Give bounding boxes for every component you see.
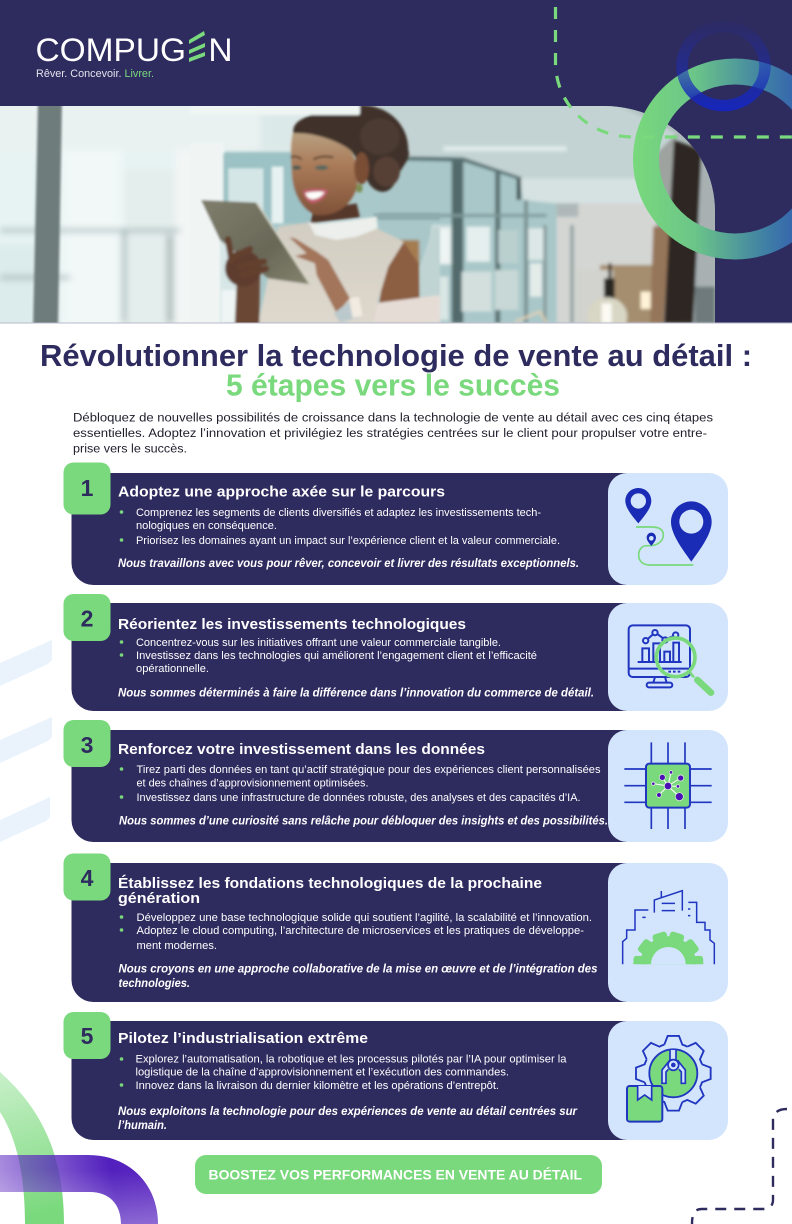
call to action button: [195, 1155, 602, 1194]
icon: map pins and route: [625, 488, 712, 565]
step 5 tagline: l’humain.: [118, 1119, 167, 1132]
woman: [190, 105, 440, 330]
step 5 heading: Pilotez l’industrialisation extrême: [118, 1030, 368, 1047]
step 1 bullets: Comprenez les segments de clients diversifiés et adaptez les investissements tech-: [136, 507, 541, 519]
step 2 heading: Réorientez les investissements technologiques: [118, 616, 466, 633]
step 1 card: [64, 462, 728, 585]
step 5 bullets: logistique de la chaîne d’approvisionnement et l’exécution des commandes.: [136, 1066, 509, 1078]
step 5 number: [64, 1012, 110, 1059]
step 2 number: [64, 594, 110, 641]
step 1 bullets: Priorisez les domaines ayant un impact sur l’expérience client et la valeur commerciale.: [136, 535, 560, 547]
title: [40, 338, 752, 402]
call to action button: BOOSTEZ VOS PERFORMANCES EN VENTE AU DÉTAIL: [208, 1166, 582, 1182]
step 5 tagline: Nous exploitons la technologie pour des expériences de vente au détail centrées sur: [118, 1105, 578, 1118]
step 5 bullets: [120, 1054, 567, 1092]
step 4 tagline: Nous croyons en une approche collaborative de la mise en œuvre et de l’intégration des: [118, 962, 598, 976]
title: 5 étapes vers le succès: [226, 368, 560, 402]
intro text: [73, 410, 713, 456]
step 5 number: 5: [81, 1023, 94, 1049]
step 4 card: [64, 854, 728, 1002]
step 3 bullets: Investissez dans une infrastructure de données robuste, des analyses et des capacités d’IA.: [136, 792, 580, 804]
step 1 number: 1: [81, 475, 94, 501]
step 4 number: 4: [81, 865, 94, 891]
icon: robot arm gear and box: [627, 1036, 711, 1122]
step 3 bullets: et des chaînes d’approvisionnement optimisées.: [136, 778, 368, 790]
step 3 number: [64, 720, 110, 767]
step 5 bullets: Explorez l’automatisation, la robotique et les processus pilotés par l’IA pour optimiser la: [136, 1054, 567, 1066]
intro text: essentielles. Adoptez l’innovation et privilégiez les stratégies centrées sur le client pour propulser votre entre-: [73, 426, 707, 440]
step 2 bullets: [120, 637, 537, 675]
hair: [293, 105, 409, 192]
step 3 heading: Renforcez votre investissement dans les données: [118, 741, 485, 758]
intro text: Débloquez de nouvelles possibilités de croissance dans la technologie de vente au détail avec ces cinq étapes: [73, 410, 713, 424]
header background: [0, 0, 792, 323]
step 4 bullets: [120, 912, 592, 952]
step 3 number: 3: [81, 732, 93, 758]
decorative chevrons: [0, 640, 52, 842]
step 4 heading: [118, 875, 542, 907]
icon: monitor with magnifier: [629, 625, 711, 693]
step 3 tagline: Nous sommes d’une curiosité sans relâche pour débloquer des insights et des possibilités.: [119, 814, 608, 828]
step 1 bullets: nologiques en conséquence.: [136, 520, 277, 532]
step 1 number: [64, 462, 110, 514]
step 1 heading: Adoptez une approche axée sur le parcours: [118, 484, 445, 500]
bottom edge of header: [0, 322, 792, 324]
step 1 bullets: [120, 507, 560, 547]
glass room: [224, 150, 382, 316]
icon: data chip: [624, 742, 712, 829]
dashed green line: [556, 7, 792, 137]
step 4 number: [64, 854, 110, 900]
logo: Rêver. Concevoir. Livrer.: [36, 68, 154, 80]
step 3 bullets: [120, 764, 601, 804]
step 2 bullets: Concentrez-vous sur les initiatives offrant une valeur commerciale tangible.: [136, 637, 501, 649]
step 3 card: [64, 720, 728, 842]
logo: COMPUGEN: [36, 32, 233, 68]
step 5 card: [64, 1012, 728, 1140]
step 5 tagline: [118, 1105, 578, 1132]
icon: city on gear: [622, 890, 716, 964]
step 4 bullets: Adoptez le cloud computing, l’architecture de microservices et les pratiques de développe-: [136, 925, 584, 937]
step 4 tagline: technologies.: [118, 977, 190, 990]
step 2 bullets: opérationnelle.: [136, 663, 209, 675]
step 4 heading: génération: [118, 890, 200, 907]
step 4 bullets: Développez une base technologique solide qui soutient l’agilité, la scalabilité et l’innovation.: [136, 912, 592, 924]
step 2 tagline: Nous sommes déterminés à faire la différence dans l’innovation du commerce de détail.: [118, 686, 594, 700]
decorative arcs bottom left: [0, 1072, 158, 1224]
step 2 bullets: Investissez dans les technologies qui améliorent l’engagement client et l’efficacité: [136, 650, 537, 662]
step 4 heading: Établissez les fondations technologiques de la prochaine: [118, 875, 542, 892]
title: Révolutionner la technologie de vente au détail :: [40, 338, 752, 373]
step 5 bullets: Innovez dans la livraison du dernier kilomètre et les opérations d’entrepôt.: [136, 1080, 499, 1092]
decorative dashed line bottom right: [692, 1109, 787, 1224]
step 1 tagline: Nous travaillons avec vous pour rêver, concevoir et livrer des résultats exceptionnels.: [118, 557, 579, 570]
hero photo: woman using a tablet: [0, 96, 715, 336]
step 4 bullets: ment modernes.: [136, 940, 217, 952]
step 4 tagline: [118, 962, 598, 990]
step 3 bullets: Tirez parti des données en tant qu’actif stratégique pour des expériences client personnalisées: [136, 764, 601, 776]
large gradient ring: [646, 72, 792, 246]
step 2 card: [64, 594, 728, 711]
step 2 number: 2: [81, 606, 93, 632]
intro text: prise vers le succès.: [73, 442, 187, 456]
small blue ring: [682, 26, 765, 106]
